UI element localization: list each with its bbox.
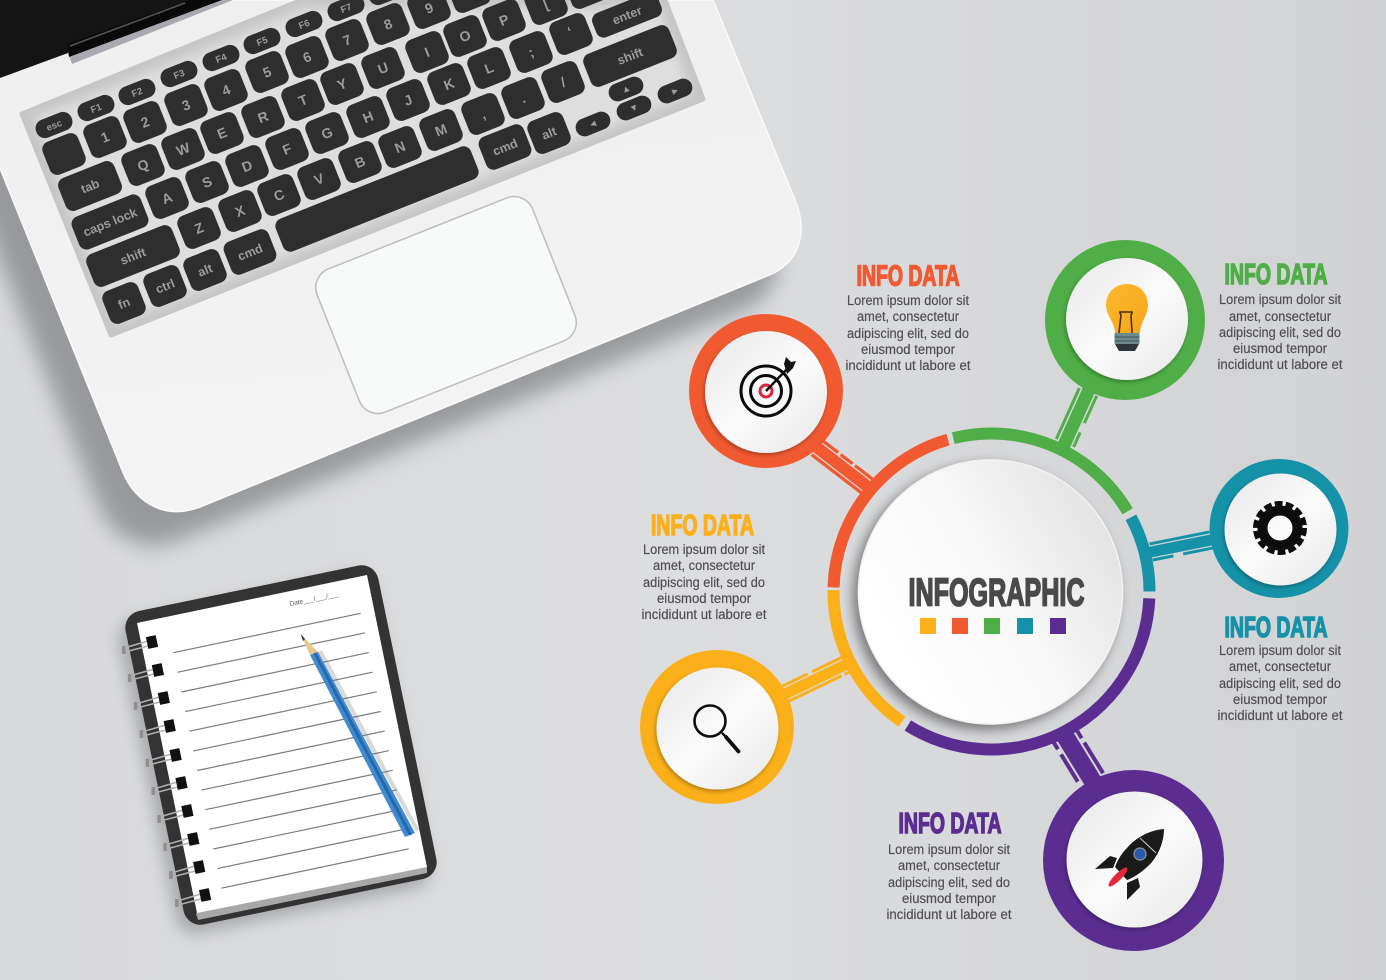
text block: green: eiusmod tempor xyxy=(1233,341,1327,356)
text block: teal xyxy=(1218,612,1343,723)
keyboard keys: E xyxy=(215,124,229,142)
text block: purple: Lorem ipsum dolor sit xyxy=(888,842,1010,857)
text block: yellow xyxy=(642,510,767,622)
text block: yellow: incididunt ut labore et xyxy=(642,607,767,622)
keyboard keys: J xyxy=(401,91,415,109)
text block: green: INFO DATA xyxy=(1224,259,1328,291)
screen edge xyxy=(0,0,217,78)
keyboard keys: ; xyxy=(526,44,536,60)
ring segment: yellow xyxy=(833,590,902,722)
keyboard keys: G xyxy=(319,124,335,142)
text block: purple: eiusmod tempor xyxy=(902,891,996,906)
keyboard keys: P xyxy=(497,11,511,29)
keyboard keys: cmd xyxy=(491,136,520,159)
text block: orange: INFO DATA xyxy=(856,260,960,292)
keyboard keys: ◄ xyxy=(587,118,600,131)
text block: orange: eiusmod tempor xyxy=(861,342,955,357)
connector: teal xyxy=(1143,529,1219,563)
keyboard keys: F2 xyxy=(130,86,145,100)
text block: purple: adipiscing elit, sed do xyxy=(888,875,1010,890)
keyboard keys: 1 xyxy=(98,128,112,146)
keyboard keys: S xyxy=(200,173,214,191)
centre disc xyxy=(858,460,1122,724)
node: orange target xyxy=(689,314,843,468)
keyboard keys: / xyxy=(558,74,568,90)
icon: rocket xyxy=(1095,829,1164,900)
keyboard keys: W xyxy=(174,139,193,159)
laptop shadow xyxy=(0,34,777,546)
notebook page edge xyxy=(196,866,427,920)
keyboard keys: 2 xyxy=(138,113,152,131)
keyboard keys: 6 xyxy=(300,48,314,66)
node: green bulb xyxy=(1045,240,1205,400)
keyboard keys: A xyxy=(159,189,175,207)
colour squares xyxy=(920,618,1066,634)
keyboard keys: K xyxy=(441,75,457,93)
keyboard keys: H xyxy=(360,108,376,126)
keyboard keys: 7 xyxy=(340,31,354,49)
date label: Date___/___/___ xyxy=(289,591,340,608)
keyboard keys: 8 xyxy=(381,15,395,33)
notebook shadow xyxy=(115,571,433,937)
keyboard keys: M xyxy=(433,120,449,140)
notebook cover xyxy=(122,562,440,928)
keyboard keys: Z xyxy=(192,219,206,237)
keyboard keys: , xyxy=(478,106,488,122)
node: teal gear xyxy=(1210,459,1348,598)
text block: purple: INFO DATA xyxy=(898,808,1002,840)
text block: orange: Lorem ipsum dolor sit xyxy=(847,293,969,308)
spiral binding xyxy=(122,635,211,907)
ring segment: teal xyxy=(1131,517,1150,592)
keyboard keys: 4 xyxy=(219,81,233,99)
laptop body xyxy=(0,0,801,512)
keyboard keys: D xyxy=(239,157,255,175)
text block: purple xyxy=(886,808,1012,922)
text block: green: incididunt ut labore et xyxy=(1218,357,1343,372)
ring segment: orange xyxy=(834,440,948,587)
keyboard keys: ‘ xyxy=(565,23,575,39)
pencil xyxy=(301,634,419,837)
ring segment: purple xyxy=(908,598,1149,749)
keyboard keys: O xyxy=(457,27,473,45)
ring segment: green xyxy=(953,434,1128,511)
keyboard keys: fn xyxy=(116,295,132,312)
node: yellow magnifier xyxy=(640,650,794,804)
trackpad xyxy=(310,191,582,419)
keyboard keys: N xyxy=(392,138,408,156)
keyboard keys: B xyxy=(352,153,368,171)
keyboard keys: F5 xyxy=(255,35,270,49)
keyboard keys: tab xyxy=(79,176,102,196)
keyboard keys: 3 xyxy=(179,96,193,114)
text block: green: Lorem ipsum dolor sit xyxy=(1219,292,1341,307)
node: purple rocket xyxy=(1043,770,1224,951)
keyboard keys: alt xyxy=(196,261,215,280)
hinge xyxy=(67,0,233,64)
connector: orange xyxy=(804,434,880,499)
keyboard keys: V xyxy=(312,170,327,188)
keyboard keys: . xyxy=(518,90,528,106)
keyboard keys: ▲ xyxy=(620,83,633,96)
keyboard keys: Q xyxy=(135,156,151,174)
keyboard keys: 5 xyxy=(260,63,274,81)
keyboard keys: ctrl xyxy=(154,276,177,297)
centre title: INFOGRAPHIC xyxy=(908,572,1084,614)
text block: teal: INFO DATA xyxy=(1224,612,1328,644)
keyboard keys: F6 xyxy=(297,18,312,32)
connector: green xyxy=(1052,380,1101,455)
text block: teal: incididunt ut labore et xyxy=(1218,708,1343,723)
keyboard keys: F3 xyxy=(172,68,187,82)
icon: light bulb xyxy=(1106,284,1148,351)
text block: green: amet, consectetur xyxy=(1229,309,1331,324)
text block: teal: adipiscing elit, sed do xyxy=(1219,676,1341,691)
keyboard keys: F1 xyxy=(89,102,104,116)
icon: gear xyxy=(1256,504,1304,552)
keyboard keys: F7 xyxy=(339,2,354,16)
keyboard keys: T xyxy=(296,91,310,109)
text block: green xyxy=(1218,259,1343,372)
keyboard keys: ► xyxy=(669,85,682,98)
text block: green: adipiscing elit, sed do xyxy=(1219,325,1341,340)
text block: orange: incididunt ut labore et xyxy=(846,358,971,373)
notebook page xyxy=(137,575,427,913)
ruled lines xyxy=(173,613,409,888)
connector: yellow xyxy=(776,653,857,705)
icon: magnifier xyxy=(694,706,738,752)
keyboard keys: U xyxy=(375,59,391,77)
text block: yellow: INFO DATA xyxy=(651,510,754,542)
keyboard keys: F xyxy=(280,140,294,158)
keyboard keys: X xyxy=(233,202,248,220)
notebook xyxy=(115,562,440,937)
text block: purple: amet, consectetur xyxy=(898,858,1000,873)
diagram xyxy=(640,240,1348,951)
text block: orange xyxy=(846,260,971,373)
text block: yellow: eiusmod tempor xyxy=(657,591,751,606)
keyboard keys: Y xyxy=(335,75,350,93)
keyboard keys: esc xyxy=(45,118,64,134)
keyboard keys: alt xyxy=(540,124,559,143)
laptop xyxy=(0,0,801,546)
keyboard keys: cmd xyxy=(236,241,265,264)
text block: teal: eiusmod tempor xyxy=(1233,692,1327,707)
text block: teal: Lorem ipsum dolor sit xyxy=(1219,643,1341,658)
keyboard keys: shift xyxy=(615,45,646,68)
text block: yellow: amet, consectetur xyxy=(653,558,755,573)
icon: target xyxy=(741,357,796,416)
text block: purple: incididunt ut labore et xyxy=(886,907,1012,922)
text block: orange: amet, consectetur xyxy=(857,309,959,324)
connector: purple xyxy=(1048,721,1109,795)
keyboard keys: F4 xyxy=(214,52,229,66)
keyboard keys: caps lock xyxy=(81,205,139,240)
keyboard keys: enter xyxy=(610,3,644,28)
text block: yellow: adipiscing elit, sed do xyxy=(643,575,765,590)
keyboard keys: R xyxy=(255,108,271,126)
text block: yellow: Lorem ipsum dolor sit xyxy=(643,542,765,557)
keyboard keys: ▼ xyxy=(628,102,641,115)
keyboard well xyxy=(22,0,703,335)
keyboard keys: shift xyxy=(118,245,149,268)
keyboard keys: C xyxy=(271,186,287,204)
keyboard keys: L xyxy=(482,59,496,77)
text block: orange: adipiscing elit, sed do xyxy=(847,326,969,341)
keyboard keys xyxy=(33,0,695,326)
text block: teal: amet, consectetur xyxy=(1229,659,1331,674)
keyboard keys: I xyxy=(422,44,432,60)
